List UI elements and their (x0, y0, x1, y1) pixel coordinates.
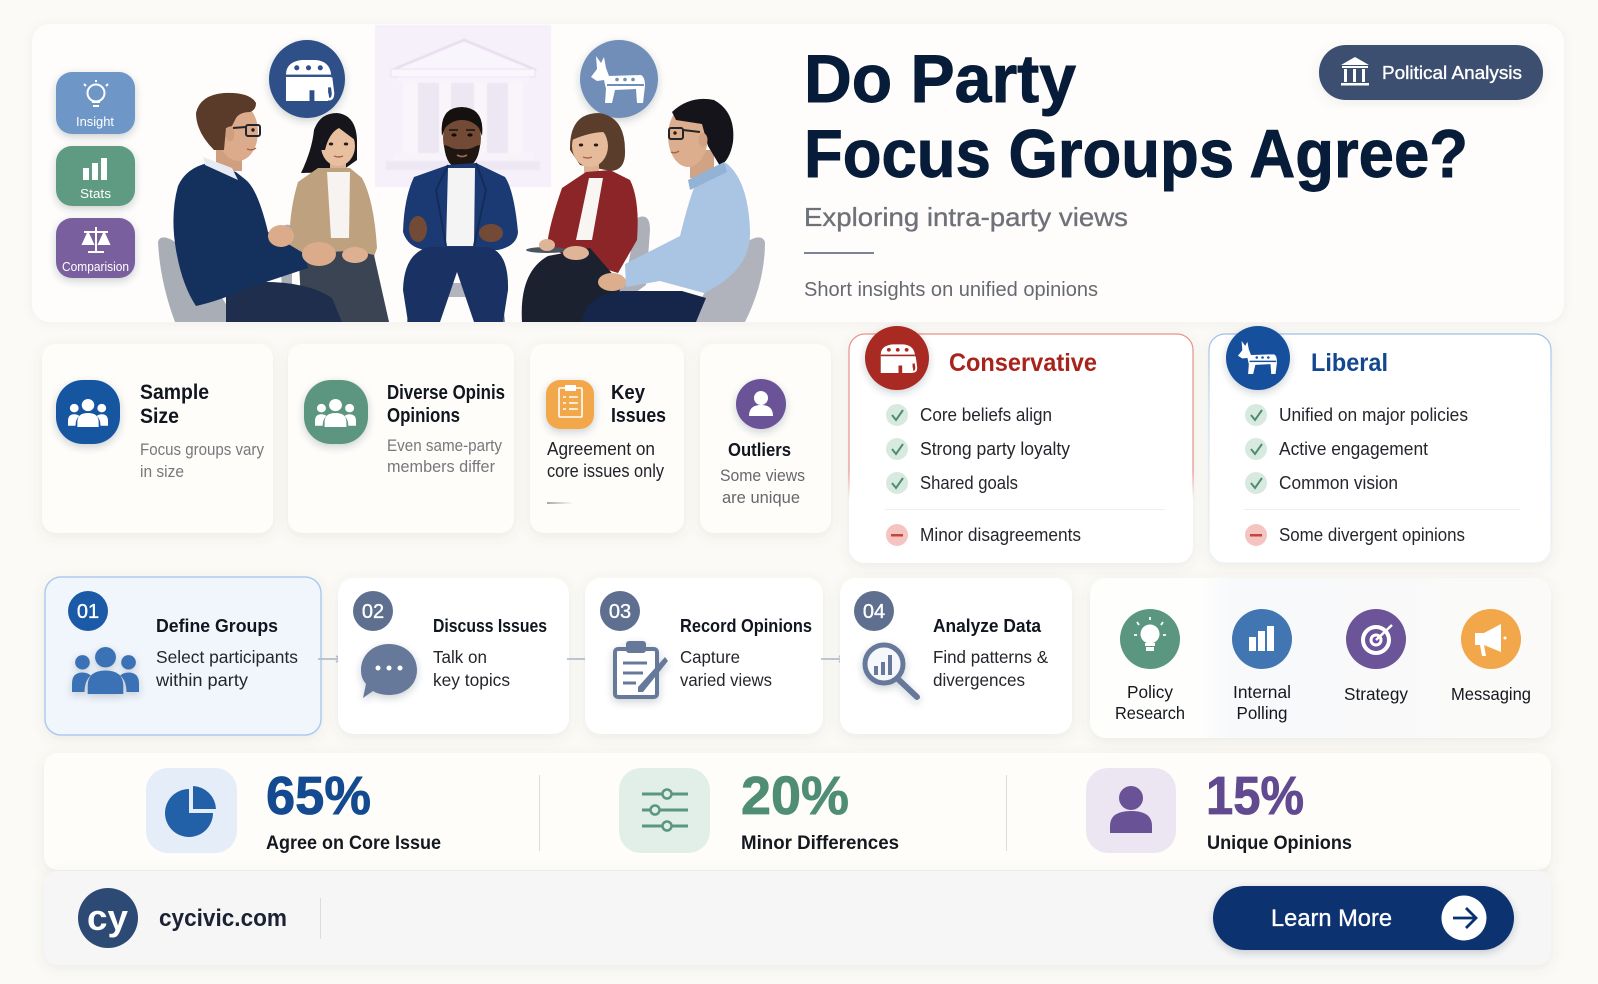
description: core issues only (547, 461, 664, 481)
icon: clipboard (546, 380, 594, 429)
item: policy research: Policy (1127, 682, 1173, 702)
disagreement point: Some divergent opinions (1279, 525, 1465, 545)
card: key issues (530, 344, 684, 533)
stat: 65 percent: Agree on Core Issue (266, 833, 441, 854)
item: messaging: Messaging (1451, 684, 1531, 704)
badge: democrat donkey (580, 40, 658, 118)
stat: 15 percent: Unique Opinions (1207, 833, 1352, 854)
number badge: 03 (609, 601, 631, 623)
description (155, 647, 298, 690)
heading: Diverse Opinis (387, 382, 505, 404)
icon: group (56, 380, 120, 444)
heading: Issues (611, 404, 666, 427)
icon: scales (83, 227, 109, 252)
title: Do Party (804, 41, 1076, 117)
number badge: 02 (362, 601, 384, 623)
item: strategy: Strategy (1344, 684, 1408, 704)
capitol panel (375, 25, 551, 187)
item: messaging (1451, 609, 1531, 704)
chip: comparision: Comparision (62, 260, 129, 274)
card: sample size (42, 344, 273, 533)
subtitle: Exploring intra-party views (804, 202, 1128, 232)
heading: Outliers (728, 439, 791, 460)
heading: Discuss Issues (433, 616, 547, 636)
description: Talk on (433, 647, 487, 667)
description (387, 436, 502, 476)
person 4: red jacket (522, 113, 650, 322)
heading: Opinions (387, 405, 460, 427)
icon: bars (83, 158, 107, 180)
icon: people (72, 647, 139, 694)
heading (611, 381, 666, 427)
description (933, 647, 1048, 690)
person 5: light blue shirt (582, 99, 765, 322)
agree points (1245, 404, 1468, 494)
person 3: navy suit (403, 107, 518, 322)
panel: liberal (1209, 326, 1551, 563)
button: learn more: Learn More (1271, 905, 1392, 932)
stat: 65 percent (146, 766, 441, 854)
panel: hero (32, 24, 1564, 322)
number badge: 01 (77, 601, 99, 623)
card: diverse opinions (288, 344, 514, 533)
agree points (886, 404, 1070, 494)
icon: person (736, 379, 786, 429)
badge: political analysis: Political Analysis (1382, 62, 1522, 83)
description: varied views (680, 670, 772, 690)
number badge (854, 591, 894, 631)
description: Some views (720, 466, 805, 485)
panel: conservative (849, 326, 1193, 563)
heading: Sample (140, 381, 209, 404)
icon: elephant (865, 326, 929, 390)
illustration: focus group discussion (158, 25, 765, 322)
icon: light bulb (84, 80, 108, 106)
stat: 15 percent (1086, 766, 1352, 854)
description: Select participants (156, 647, 298, 667)
agree points: Core beliefs align (920, 405, 1052, 425)
stat: 15 percent: 15% (1206, 766, 1304, 826)
description (547, 439, 664, 481)
heading: Analyze Data (933, 616, 1042, 636)
title: Focus Groups Agree? (804, 116, 1468, 192)
description: Even same-party (387, 436, 502, 455)
item: internal polling (1232, 609, 1292, 723)
panel: footer (44, 871, 1551, 965)
icon: donkey (1226, 326, 1290, 390)
title (804, 41, 1468, 192)
icon: group (304, 380, 368, 444)
item: internal polling: Polling (1236, 703, 1288, 723)
item: strategy (1344, 609, 1408, 704)
chip: insight (56, 72, 135, 134)
agree points: Unified on major policies (1279, 405, 1468, 425)
person 1: navy sweater (158, 93, 342, 322)
icon: speech bubble (361, 644, 417, 698)
description (140, 440, 264, 481)
heading: Key (611, 381, 646, 404)
description (720, 466, 805, 507)
heading: Liberal (1311, 349, 1388, 377)
stat: 20 percent: 20% (741, 766, 849, 826)
heading: Record Opinions (680, 616, 812, 636)
card: outliers (700, 344, 831, 533)
description (433, 647, 510, 690)
person 2: tan jacket (279, 113, 389, 322)
step 2: discuss issues (338, 578, 569, 734)
description: in size (140, 462, 184, 481)
icon: magnifier with chart (865, 645, 917, 697)
chip: stats: Stats (80, 186, 112, 201)
arrow: step 3 to 4 (821, 656, 844, 662)
step 4: analyze data (840, 578, 1072, 734)
icon: institution (1341, 57, 1369, 86)
disagreement point: Minor disagreements (920, 525, 1081, 545)
heading: Size (140, 405, 179, 428)
stat: 20 percent: Minor Differences (741, 833, 899, 854)
description: Capture (680, 647, 740, 667)
stat: 65 percent: 65% (266, 766, 371, 826)
arrow: step 2 to 3 (567, 656, 590, 662)
button: learn more (1213, 886, 1514, 950)
website: cycivic.com (159, 905, 287, 932)
agree points: Active engagement (1279, 439, 1428, 459)
agree points: Common vision (1279, 473, 1398, 493)
icon: arrow (1442, 896, 1486, 940)
chip: stats (56, 146, 135, 206)
arrow: step 1 to 2 (318, 656, 341, 662)
panel: statistics (44, 753, 1551, 870)
heading (387, 382, 505, 427)
stat: 20 percent (619, 766, 899, 854)
number badge (353, 591, 393, 631)
heading: Conservative (949, 349, 1097, 377)
description: within party (155, 670, 248, 690)
item: internal polling: Internal (1233, 682, 1291, 702)
item: policy research: Research (1115, 703, 1185, 723)
number badge (600, 591, 640, 631)
description: Focus groups vary (140, 440, 264, 459)
logo (78, 888, 138, 948)
description: divergences (933, 670, 1025, 690)
description: Find patterns & (933, 647, 1048, 667)
icon: clipboard and pencil (615, 641, 668, 697)
heading (140, 381, 209, 428)
agree points: Shared goals (920, 473, 1018, 493)
number badge (68, 591, 108, 631)
description: key topics (433, 670, 510, 690)
agree points: Strong party loyalty (920, 439, 1070, 459)
chip: insight: Insight (76, 115, 115, 129)
description: are unique (722, 488, 800, 507)
heading: Define Groups (156, 616, 278, 636)
chip: comparision (56, 218, 135, 278)
badge: political analysis (1319, 45, 1543, 100)
description (680, 647, 772, 690)
panel: applications (1090, 578, 1551, 738)
tagline: Short insights on unified opinions (804, 278, 1098, 301)
step 1: define groups (45, 577, 321, 735)
logo: cy (87, 897, 128, 938)
badge: republican elephant (269, 40, 345, 118)
number badge: 04 (863, 601, 885, 623)
step 3: record opinions (585, 578, 823, 734)
description: Agreement on (547, 439, 655, 459)
description: members differ (387, 457, 495, 476)
item: policy research (1115, 609, 1185, 723)
